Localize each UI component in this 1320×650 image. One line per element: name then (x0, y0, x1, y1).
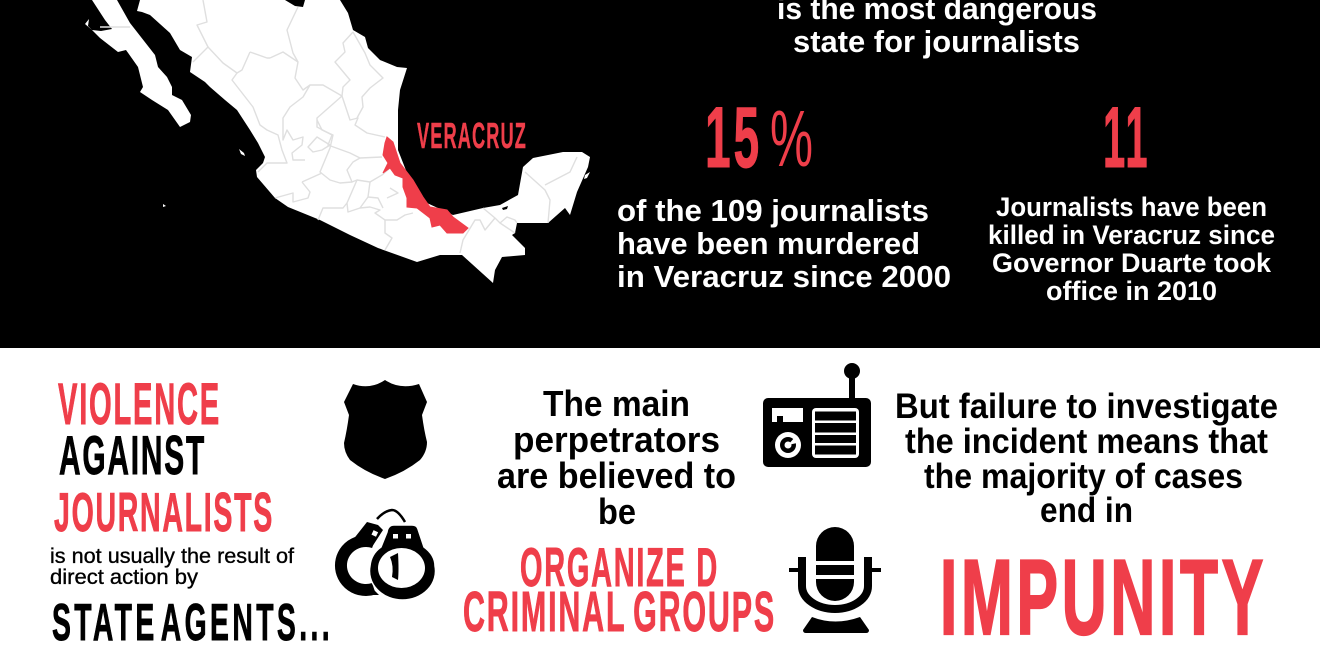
map: Baja California peninsula (85, 0, 191, 127)
heading: most dangerous state: state for journalists (793, 24, 1080, 59)
text: organized criminal groups: CRIMINAL GROUPS (463, 580, 776, 644)
text: failure to investigate: the incident means that (905, 422, 1268, 461)
text: failure to investigate: end in (1040, 491, 1133, 530)
stat: 15 percent: 15 (705, 90, 762, 186)
text: 11 description: Journalists have been (996, 192, 1267, 222)
text: 11 description (988, 192, 1275, 306)
text: violence against journalists: VIOLENCE (58, 372, 221, 437)
text: failure to investigate (895, 387, 1278, 530)
text: violence against journalists: JOURNALISTS (54, 481, 274, 543)
text: main perpetrators: be (598, 491, 636, 532)
text: 11 description: office in 2010 (1046, 276, 1217, 306)
panel: black top section (0, 0, 1320, 348)
map: small island (239, 149, 245, 156)
text: failure to investigate: But failure to investigate (895, 387, 1278, 426)
text: 15 percent description: have been murdered (617, 226, 920, 261)
icon: radio (763, 363, 871, 467)
text: 15 percent description: in Veracruz since 2000 (617, 259, 951, 294)
text: main perpetrators: perpetrators (513, 419, 720, 460)
text: failure to investigate: the majority of cases (924, 457, 1243, 496)
text: main perpetrators: The main (543, 383, 690, 424)
text: 15 percent description: of the 109 journalists (617, 193, 929, 228)
text: main perpetrators: are believed to (497, 455, 736, 496)
text: violence against journalists: AGAINST (59, 424, 206, 486)
text: main perpetrators (497, 383, 736, 532)
map: state borders (100, 0, 577, 253)
label: Veracruz: VERACRUZ (417, 115, 527, 156)
icon: police badge (344, 380, 427, 479)
map: mainland Mexico (137, 0, 590, 283)
text: violence against journalists (50, 372, 333, 650)
text: 11 description: Governor Duarte took (992, 248, 1272, 278)
text: organized criminal groups (463, 536, 776, 644)
map: Veracruz state highlighted (383, 137, 468, 233)
text: 11 description: killed in Veracruz since (988, 220, 1275, 250)
text: 11 (1103, 90, 1150, 186)
text: violence against journalists: is not usually the result of (50, 545, 294, 568)
heading: most dangerous state (777, 0, 1097, 59)
text: 15 percent description (617, 193, 951, 294)
icon: handcuffs (341, 510, 436, 600)
icon: microphone (789, 527, 881, 633)
stat: 15 percent: % (770, 94, 813, 183)
text: organized criminal groups: ORGANIZE D (520, 536, 719, 598)
text: violence against journalists: direct action by (50, 566, 199, 589)
map of Mexico (85, 0, 590, 283)
